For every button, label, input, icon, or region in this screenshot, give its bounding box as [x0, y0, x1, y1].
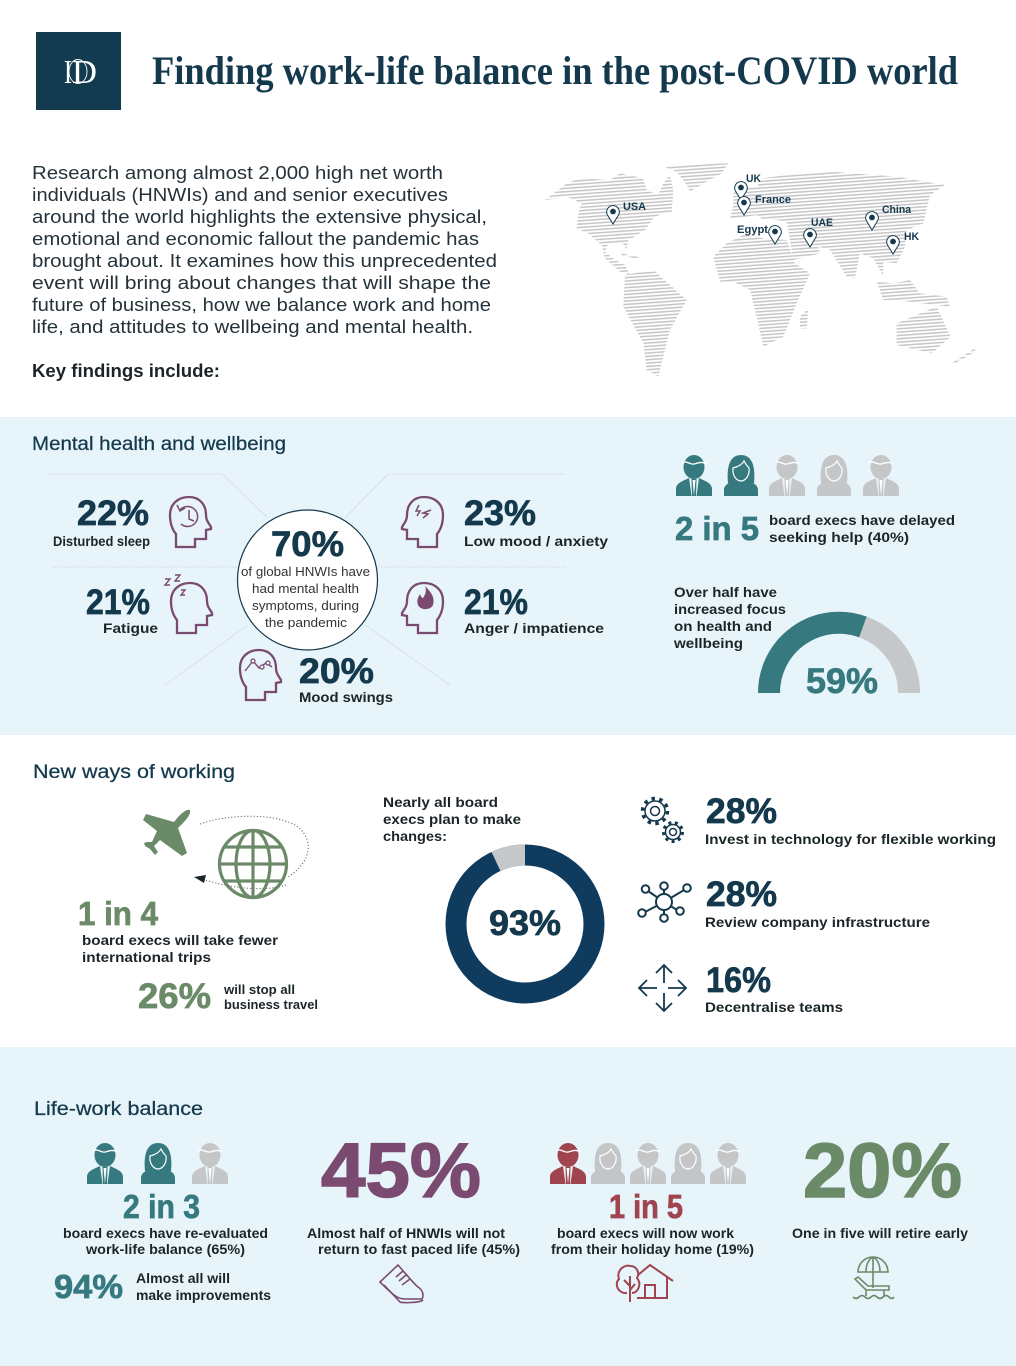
stat: decentralise: Decentralise teams — [705, 999, 843, 1015]
stat: 94% — [54, 1268, 271, 1305]
pin: UAE: UAE — [811, 217, 833, 229]
stat: anger: 21% — [464, 583, 528, 622]
header logo: D — [72, 54, 97, 91]
stat: 45% — [307, 1128, 520, 1257]
stat: fatigue: Fatigue — [103, 620, 158, 636]
stat: 2 in 3: work-life balance (65%) — [85, 1241, 245, 1257]
icon row: 1 in 5 people — [550, 1143, 746, 1184]
donut chart: 93%: 93% — [489, 904, 561, 943]
stat: 45%: 45% — [321, 1128, 481, 1214]
stat: anger — [402, 583, 604, 636]
world map — [545, 163, 975, 377]
stat: decentralise: 16% — [706, 961, 771, 1000]
intro text: emotional and economic fallout the pandemic has — [32, 229, 479, 249]
stat: 45%: Almost half of HNWIs will not — [307, 1225, 505, 1241]
header logo: I — [64, 54, 72, 91]
stat: mood swings — [240, 650, 393, 705]
pin: Egypt — [737, 224, 781, 244]
icon: gears — [642, 798, 682, 842]
text: over half: on health and — [674, 618, 772, 634]
stat: 2 in 5: seeking help (40%) — [769, 529, 909, 545]
stat: low mood: Low mood / anxiety — [464, 533, 608, 549]
pin: France: France — [755, 194, 791, 206]
key findings label: Key findings include: — [32, 361, 220, 381]
intro text: event will bring about changes that will shape the — [32, 273, 491, 293]
icon: head with flame — [402, 583, 443, 633]
stat: 20%: 20% — [803, 1128, 962, 1214]
icon: tree and house — [617, 1265, 673, 1302]
icon: plane and globe — [143, 810, 308, 898]
stat: disturbed sleep: Disturbed sleep — [53, 533, 150, 549]
donut chart: 93% — [456, 855, 594, 993]
stat: 1 in 5: 1 in 5 — [609, 1188, 683, 1225]
icon: network — [638, 882, 691, 922]
heading: New ways of working — [33, 762, 235, 783]
stat: 2 in 5: board execs have delayed — [769, 512, 955, 528]
gauge: 59% — [769, 623, 909, 701]
stat: 2 in 3: 2 in 3 — [123, 1188, 200, 1225]
text: nearly all: changes: — [383, 828, 447, 844]
stat: decentralise — [639, 961, 843, 1015]
central circle: of global HNWIs have — [241, 564, 370, 579]
text: over half — [673, 584, 786, 651]
heading: Life-work balance — [34, 1099, 203, 1120]
stat: fatigue — [86, 575, 212, 636]
icon: head with clock — [170, 497, 211, 547]
pin: Egypt: Egypt — [737, 224, 768, 236]
stat: 45%: return to fast paced life (45%) — [318, 1241, 520, 1257]
text: over half: increased focus — [674, 601, 786, 617]
intro text: brought about. It examines how this unprecedented — [32, 251, 497, 271]
intro text: individuals (HNWIs) and and senior executives — [32, 185, 448, 205]
stat: low mood — [402, 494, 608, 549]
stat: 2 in 3 — [63, 1188, 268, 1257]
central circle: the pandemic — [265, 615, 348, 630]
stat: 26%: will stop all — [223, 982, 295, 997]
stat: disturbed sleep: 22% — [77, 494, 149, 533]
stat: 26%: business travel — [224, 997, 318, 1012]
stat: fatigue: 21% — [86, 583, 150, 622]
stat: 94%: make improvements — [136, 1287, 271, 1303]
stat: 1 in 5: board execs will now work — [557, 1225, 734, 1241]
stat: 1 in 5 — [551, 1188, 754, 1257]
stat: 2 in 3: board execs have re-evaluated — [63, 1225, 268, 1241]
stat: 1 in 5: from their holiday home (19%) — [551, 1241, 754, 1257]
title: Finding work-life balance in the post-COVID world — [152, 48, 958, 93]
text: nearly all: Nearly all board — [383, 794, 498, 810]
stat: disturbed sleep — [53, 494, 211, 549]
text: over half: wellbeing — [673, 635, 743, 651]
intro text: life, and attitudes to wellbeing and mental health. — [32, 317, 473, 337]
stat: mood swings: 20% — [299, 652, 374, 691]
intro text: Research among almost 2,000 high net worth — [32, 163, 443, 183]
panel: new ways of working — [33, 762, 996, 1016]
icon: running shoe — [380, 1265, 423, 1303]
pin: UK: UK — [746, 173, 761, 185]
central circle: had mental health — [252, 581, 359, 596]
stat: 94%: Almost all will — [136, 1270, 230, 1286]
stat: 94%: 94% — [54, 1268, 123, 1305]
stat: 26% — [138, 977, 318, 1016]
stat: 2 in 5 — [675, 510, 955, 547]
icon: sun lounger and umbrella — [853, 1257, 894, 1298]
stat: infrastructure: 28% — [706, 875, 777, 914]
text: nearly all — [383, 794, 521, 844]
stat: 1 in 4: board execs will take fewer — [82, 932, 279, 948]
panel: mental health and wellbeing — [0, 417, 1016, 735]
striped continents — [545, 163, 975, 377]
text: nearly all: execs plan to make — [383, 811, 521, 827]
icon: sleeping head — [165, 575, 212, 633]
intro text — [32, 163, 497, 337]
stat: technology: 28% — [706, 792, 777, 831]
pin: HK: HK — [904, 231, 919, 243]
pin: China — [866, 204, 912, 230]
central circle — [238, 510, 378, 650]
stat: technology — [642, 792, 996, 847]
header logo — [36, 32, 121, 110]
pin: UK — [735, 173, 761, 200]
stat: 1 in 4 — [78, 895, 279, 965]
stat: low mood: 23% — [464, 494, 536, 533]
icon: head with lightning — [402, 497, 443, 547]
pin: UAE — [804, 217, 833, 247]
stat: 20% — [792, 1128, 968, 1241]
intro text: around the world highlights the extensive physical, — [32, 207, 487, 227]
central circle: 70% — [271, 525, 344, 564]
icon: head with chart — [240, 650, 281, 700]
intro text: future of business, how we balance work and home — [32, 295, 491, 315]
text: over half: Over half have — [674, 584, 777, 600]
pin: USA — [607, 201, 646, 224]
stat: technology: Invest in technology for flexible working — [705, 831, 996, 847]
pin: HK — [887, 231, 919, 254]
icon: four arrows — [639, 965, 686, 1011]
icon row: 2 in 5 people — [676, 455, 899, 496]
stat: 26%: 26% — [138, 977, 211, 1016]
stat: 1 in 4: international trips — [82, 949, 211, 965]
icon row: 2 in 3 people — [87, 1143, 228, 1184]
pin: USA: USA — [623, 201, 646, 213]
central circle: symptoms, during — [252, 598, 359, 613]
stat: 20%: One in five will retire early — [792, 1225, 968, 1241]
stat: infrastructure — [638, 875, 930, 930]
pin: France — [738, 194, 791, 215]
gauge: 59%: 59% — [806, 662, 878, 701]
stat: 2 in 5: 2 in 5 — [675, 510, 759, 547]
stat: 1 in 4: 1 in 4 — [78, 895, 159, 932]
pin: China: China — [882, 204, 912, 216]
stat: mood swings: Mood swings — [299, 689, 393, 705]
panel: life-work balance — [0, 1047, 1016, 1366]
stat: infrastructure: Review company infrastructure — [705, 914, 930, 930]
heading: Mental health and wellbeing — [32, 434, 286, 455]
stat: anger: Anger / impatience — [464, 620, 604, 636]
